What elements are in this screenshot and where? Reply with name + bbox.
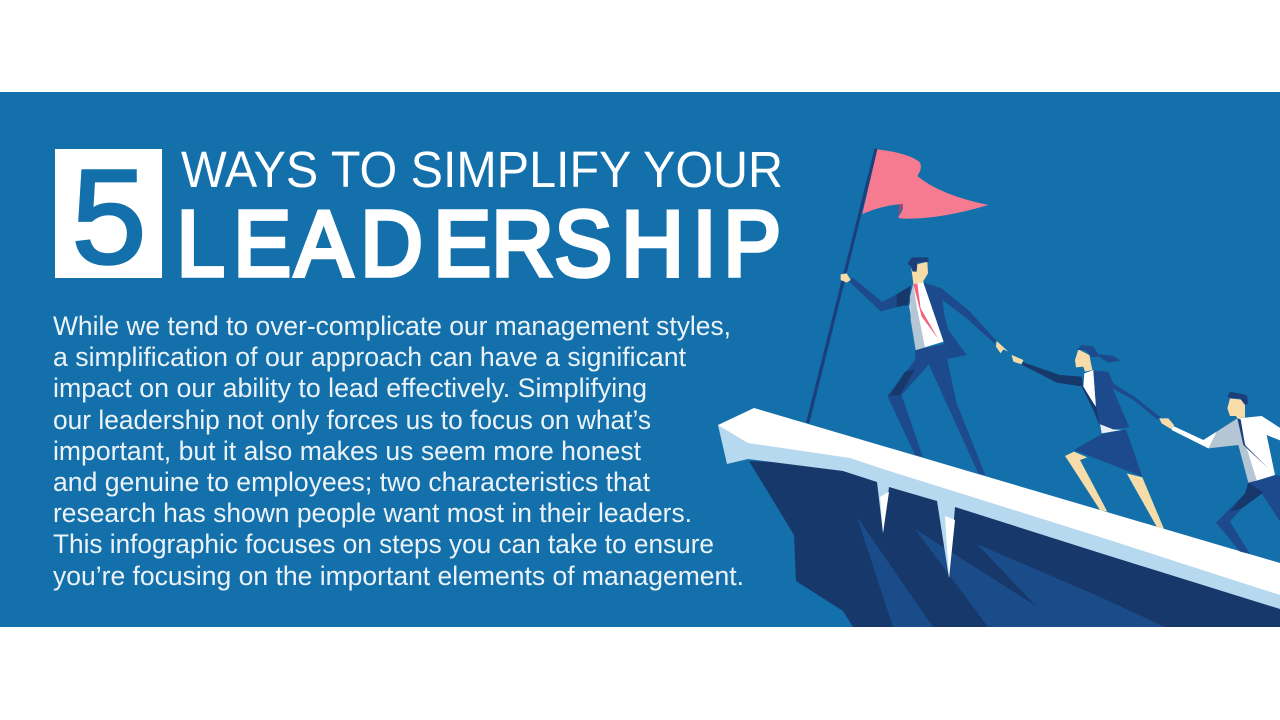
- flag and lead man: [806, 148, 1040, 475]
- number five badge: [55, 143, 162, 292]
- intro paragraph: you’re focusing on the important elements of management.: [53, 561, 744, 591]
- number five badge: 5: [72, 143, 146, 292]
- intro paragraph: This infographic focuses on steps you can take to ensure: [53, 529, 714, 559]
- cliff and ice ledge: [718, 408, 1280, 627]
- intro paragraph: and genuine to employees; two characteristics that: [53, 467, 651, 497]
- intro paragraph: impact on our ability to lead effectively. Simplifying: [53, 373, 647, 403]
- blue banner background: [0, 92, 1280, 627]
- woman: [1012, 345, 1174, 529]
- woman and third climber: [1012, 345, 1280, 554]
- third climber: [1172, 392, 1280, 554]
- title: WAYS TO SIMPLIFY YOUR: [181, 141, 783, 198]
- infographic header: [0, 92, 1280, 627]
- title: LEADERSHIP: [177, 193, 781, 296]
- intro paragraph: our leadership not only forces us to focus on what’s: [53, 405, 651, 435]
- intro paragraph: While we tend to over-complicate our management styles,: [53, 311, 731, 341]
- illustration: climbing team on cliff: [718, 148, 1280, 627]
- intro paragraph: [53, 311, 744, 591]
- flag: [862, 149, 988, 219]
- lead man: [841, 257, 1040, 475]
- intro paragraph: important, but it also makes us seem more honest: [53, 436, 642, 466]
- intro paragraph: a simplification of our approach can have a significant: [53, 342, 687, 372]
- flag pole: [806, 148, 878, 423]
- title: [177, 141, 783, 296]
- intro paragraph: research has shown people want most in their leaders.: [53, 498, 692, 528]
